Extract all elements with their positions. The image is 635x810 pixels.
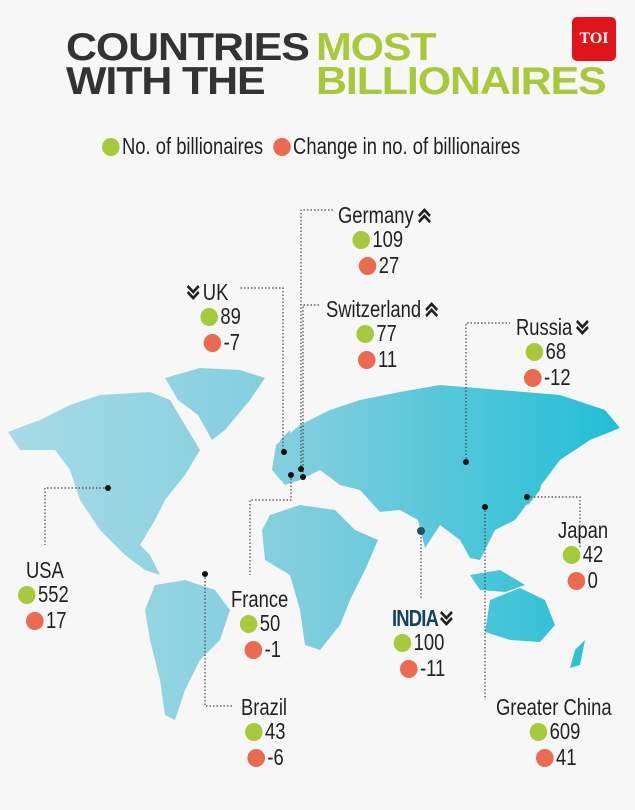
label: Switzerland: [326, 296, 438, 372]
label: UK: UK: [203, 279, 228, 305]
title: BILLIONAIRES: [316, 60, 605, 103]
label: Switzerland: Switzerland: [326, 296, 421, 322]
label: Japan: 0: [588, 567, 598, 593]
world map: [8, 368, 620, 720]
label: USA: USA: [26, 557, 64, 583]
label: UK: -7: [224, 329, 240, 355]
label: France: 50: [260, 610, 280, 636]
label: Russia: Russia: [516, 314, 572, 340]
title: MOST: [316, 26, 436, 69]
label: Japan: 42: [583, 541, 603, 567]
label: France: -1: [265, 636, 281, 662]
label: Switzerland: 11: [378, 346, 397, 372]
label: Germany: 27: [379, 252, 399, 278]
legend: No. of billionaires Change in no. of billionaires: [122, 133, 520, 159]
label: France: [231, 586, 288, 662]
location dots: [105, 449, 530, 577]
label: USA: [18, 557, 69, 633]
label: Greater China: [496, 694, 612, 770]
label: Germany: [338, 202, 431, 278]
label: Japan: Japan: [558, 517, 608, 543]
label: Brazil: -6: [267, 744, 284, 770]
label: Brazil: Brazil: [241, 694, 287, 720]
label: India: 100: [414, 629, 444, 655]
label: USA: 17: [46, 607, 66, 633]
label: India: -11: [420, 655, 445, 681]
label: Switzerland: 77: [376, 320, 397, 346]
label: USA: 552: [38, 581, 69, 607]
leader lines: [45, 210, 580, 706]
title: [66, 26, 605, 103]
label: France: France: [231, 586, 288, 612]
label: Russia: [516, 314, 589, 390]
label: Greater China: 609: [550, 718, 580, 744]
label: Brazil: 43: [265, 718, 285, 744]
title: COUNTRIES: [66, 26, 309, 69]
label: Greater China: 41: [556, 744, 576, 770]
label: India: INDIA: [392, 605, 438, 631]
label: Russia: 68: [546, 338, 566, 364]
logo: TOI: TOI: [579, 30, 609, 47]
label: Greater China: Greater China: [496, 694, 612, 720]
label: Germany: Germany: [338, 202, 414, 228]
title: WITH THE: [66, 60, 265, 103]
label: Russia: -12: [544, 364, 571, 390]
label: UK: 89: [220, 303, 241, 329]
logo: TOI: [572, 17, 616, 61]
label: Japan: [558, 517, 608, 593]
label: Brazil: [241, 694, 287, 770]
label: India: [392, 605, 453, 681]
label: Germany: 109: [372, 226, 403, 252]
label: UK: [186, 279, 241, 355]
